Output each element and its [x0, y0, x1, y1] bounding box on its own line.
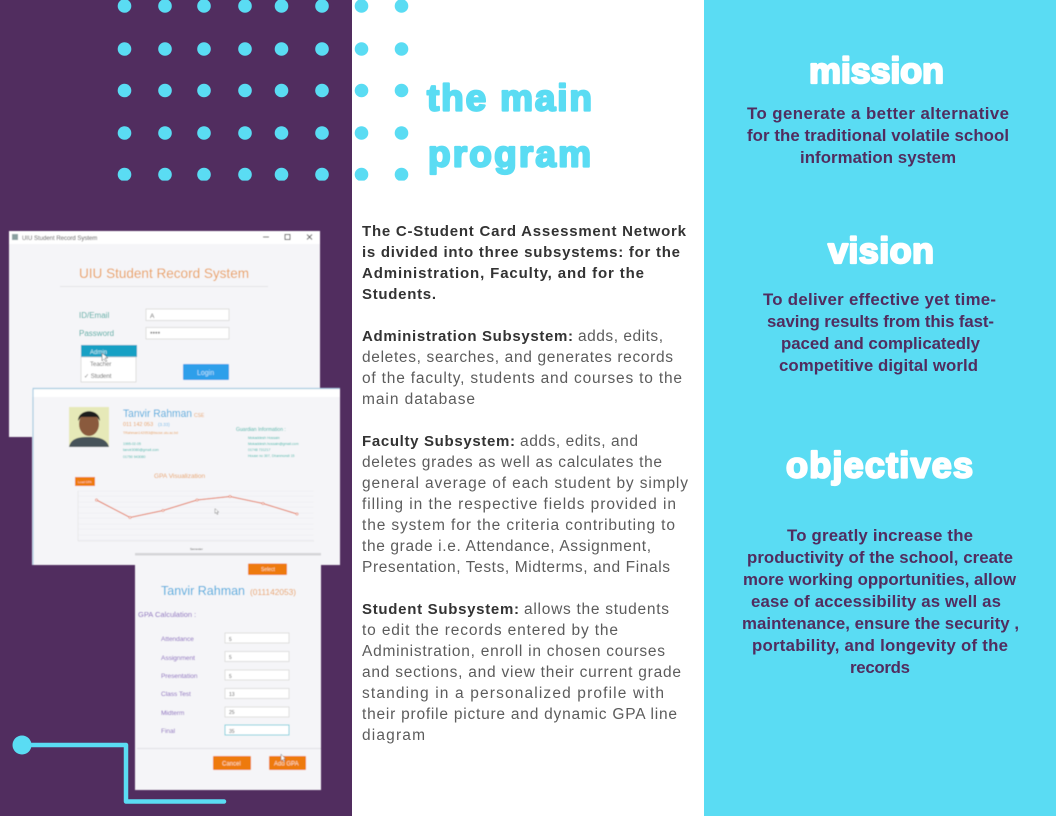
title: the main program: the main — [427, 78, 592, 118]
screenshot: GPA calculation window: Presentation — [161, 673, 198, 680]
title: the main program: program — [428, 134, 591, 174]
screenshot: student profile window: (3.33) — [158, 422, 170, 427]
screenshot: student profile window: tanvir3080@gmail.com — [123, 448, 159, 452]
text block: objectives statement: productivity of the school, create — [747, 548, 1013, 567]
screenshot: student profile window: Mokaddesh Hossain — [248, 436, 280, 440]
screenshot: GPA calculation window: Class Test — [161, 691, 191, 698]
screenshot: student profile window: GPA Visualization — [154, 473, 205, 480]
text block: faculty subsystem: Faculty Subsystem: — [362, 433, 515, 450]
screenshot: login window: Admin — [90, 350, 107, 356]
text block: student subsystem: standing in a personalized profile with — [362, 685, 664, 702]
GPA line chart: Semester — [190, 547, 203, 551]
screenshot: GPA calculation window: 25 — [229, 710, 235, 716]
text block: administration subsystem: main database — [362, 391, 475, 408]
text block: faculty subsystem: the system for the criteria contributing to — [362, 517, 675, 534]
text block: student subsystem — [362, 601, 681, 744]
connector line with dot — [12, 736, 224, 802]
text block: vision statement: saving results from this fast- — [767, 312, 994, 331]
screenshot: GPA calculation window: Tanvir Rahman — [161, 583, 245, 598]
text block: objectives statement: portability, and longevity of the — [752, 636, 1008, 655]
screenshot: GPA calculation window: 35 — [229, 729, 235, 735]
text block: introduction: The C-Student Card Assessment Network — [362, 223, 687, 240]
text block: mission statement: information system — [800, 148, 956, 167]
text block: objectives statement: maintenance, ensure the security , — [742, 614, 1019, 633]
text block: student subsystem: Student Subsystem: — [362, 601, 519, 618]
text block: student subsystem: and sections, and view their current grade — [362, 664, 681, 681]
screenshot: login window: Teacher — [90, 362, 111, 368]
text block: faculty subsystem: filling in the respective fields provided in — [362, 496, 676, 513]
text block: introduction: Administration, Faculty, and for the — [362, 265, 644, 282]
screenshot: student profile window: 1995-02-05 — [123, 442, 141, 446]
text block: objectives statement: more working opportunities, allow — [743, 570, 1017, 589]
text block: objectives statement — [742, 526, 1019, 677]
title: the main program — [427, 78, 592, 174]
dot grid pattern — [118, 0, 408, 181]
screenshot: login window: Password — [79, 329, 114, 338]
screenshot: GPA calculation window: 13 — [229, 692, 235, 698]
screenshot: login window: Login — [197, 370, 214, 377]
screenshot: student profile window: 01748 731217 — [248, 448, 270, 452]
screenshot: student profile window — [32, 388, 340, 565]
text block: student subsystem: allows the students — [524, 601, 669, 618]
text block: administration subsystem — [362, 328, 682, 408]
text block: administration subsystem: of the faculty, students and courses to the — [362, 370, 682, 387]
panel: cyan right background — [704, 0, 1056, 816]
text block: faculty subsystem — [362, 433, 688, 576]
panel: purple left background — [0, 0, 352, 816]
screenshot: login window — [9, 231, 320, 437]
text block: faculty subsystem: deletes grades as well as calculates the — [362, 454, 662, 471]
text block: faculty subsystem: adds, edits, and — [520, 433, 638, 450]
text block: mission statement: To generate a better alternative — [747, 104, 1009, 123]
text block: faculty subsystem: the grade i.e. Attendance, Assignment, — [362, 538, 651, 555]
screenshot: GPA calculation window: 5 — [229, 655, 232, 661]
screenshot: student profile window: House no 307, Dhanmondi 15 — [248, 454, 295, 458]
text block: introduction: is divided into three subsystems: for the — [362, 244, 680, 261]
screenshot: GPA calculation window: Add GPA — [274, 762, 299, 768]
text block: objectives statement: ease of accessibility as well as — [751, 592, 1001, 611]
profile photo — [69, 407, 109, 447]
screenshot: GPA calculation window: (011142053) — [250, 588, 296, 597]
screenshot: GPA calculation window — [135, 553, 321, 790]
text block: faculty subsystem: Presentation, Tests, Midterms, and Finals — [362, 559, 670, 576]
text block: administration subsystem: Administration Subsystem: — [362, 328, 573, 345]
screenshot: student profile window: Load GPA — [78, 480, 92, 484]
screenshot: login window: ID/Email — [79, 311, 109, 320]
text block: objectives statement: To greatly increase the — [787, 526, 973, 545]
text block: vision statement: To deliver effective yet time- — [763, 290, 996, 309]
text block: introduction: Students. — [362, 286, 436, 303]
screenshot: GPA calculation window: Cancel — [222, 762, 241, 768]
screenshot: student profile window: 01750 943080 — [123, 455, 145, 459]
screenshot: student profile window: CSE — [194, 413, 205, 419]
text block: introduction — [362, 223, 687, 303]
heading: vision: vision — [828, 230, 934, 271]
text block: faculty subsystem: general average of each student by simply — [362, 475, 688, 492]
screenshot: login window: A — [150, 313, 155, 320]
screenshot: GPA calculation window: Final — [161, 728, 176, 735]
text block: administration subsystem: adds, edits, — [578, 328, 663, 345]
text block: vision statement: paced and complicatedly — [781, 334, 981, 353]
text block: mission statement — [747, 104, 1009, 167]
GPA line chart — [78, 491, 314, 551]
screenshot: GPA calculation window: 5 — [229, 637, 232, 643]
screenshot: GPA calculation window: GPA Calculation : — [138, 610, 196, 619]
screenshot: student profile window: Mokaddesh.hossain@gmail.com — [248, 442, 299, 446]
screenshot: GPA calculation window: Midterm — [161, 710, 184, 717]
screenshot: GPA calculation window: Select — [261, 567, 276, 573]
screenshot: GPA calculation window: 5 — [229, 674, 232, 680]
text block: student subsystem: diagram — [362, 727, 425, 744]
panel: white centre background — [352, 0, 704, 816]
text block: objectives statement: records — [850, 658, 910, 677]
text block: student subsystem: to edit the records entered by the — [362, 622, 618, 639]
screenshot: GPA calculation window: Attendance — [161, 636, 194, 643]
text block: administration subsystem: deletes, searches, and generates records — [362, 349, 673, 366]
screenshot: student profile window: Guardian Information : — [236, 427, 286, 433]
screenshot: student profile window: Tanvir Rahman — [123, 408, 192, 420]
text block: mission statement: for the traditional volatile school — [747, 126, 1009, 145]
screenshot: login window: UIU Student Record System — [79, 265, 249, 281]
text block: vision statement: competitive digital world — [779, 356, 978, 375]
text block: vision statement — [763, 290, 996, 375]
screenshot: student profile window: 011 142 053 — [123, 422, 153, 428]
heading: objectives: objectives — [786, 444, 973, 486]
heading: mission: mission — [809, 50, 944, 91]
text block: student subsystem: their profile picture and dynamic GPA line — [362, 706, 677, 723]
screenshot: login window: UIU Student Record System — [22, 236, 97, 242]
screenshot: login window: **** — [150, 331, 161, 338]
screenshot: student profile window: TRahman142053@bscse.uiu.ac.bd — [123, 431, 178, 435]
screenshot: GPA calculation window: Assignment — [161, 655, 195, 662]
screenshot: login window: ✓ Student — [84, 374, 112, 380]
text block: student subsystem: Administration, enroll in chosen courses — [362, 643, 665, 660]
